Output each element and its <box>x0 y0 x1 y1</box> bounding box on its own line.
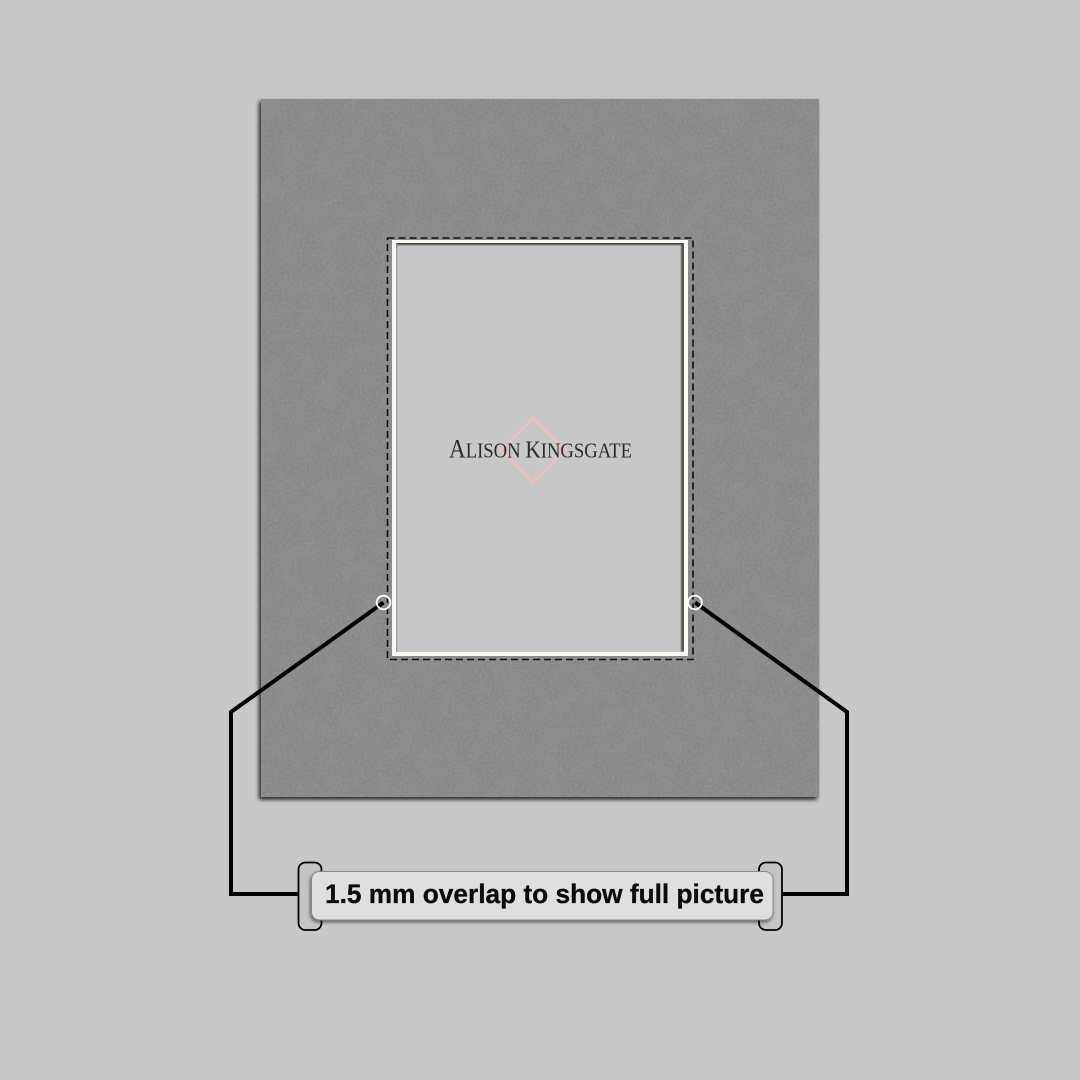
arrow: left leader line <box>231 602 384 894</box>
infographic: picture mount diagram <box>229 98 849 931</box>
icon: right marker circle <box>688 596 702 609</box>
dashed overlap outline <box>388 238 693 660</box>
logo: Alison Kingsgate <box>449 418 632 482</box>
panel: grey mount board <box>261 99 819 797</box>
logo wordmark: ALISON KINGSGATE <box>449 434 632 464</box>
window opening: white bevel and picture area <box>392 240 688 656</box>
icon: pink diamond <box>501 418 565 482</box>
callout text: 1.5 mm overlap to show full picture <box>325 879 764 909</box>
icon: left marker circle <box>377 596 390 609</box>
callout: label <box>312 872 773 920</box>
arrow: right leader line <box>695 602 847 894</box>
left label bracket <box>298 862 322 930</box>
right label bracket <box>759 862 782 930</box>
